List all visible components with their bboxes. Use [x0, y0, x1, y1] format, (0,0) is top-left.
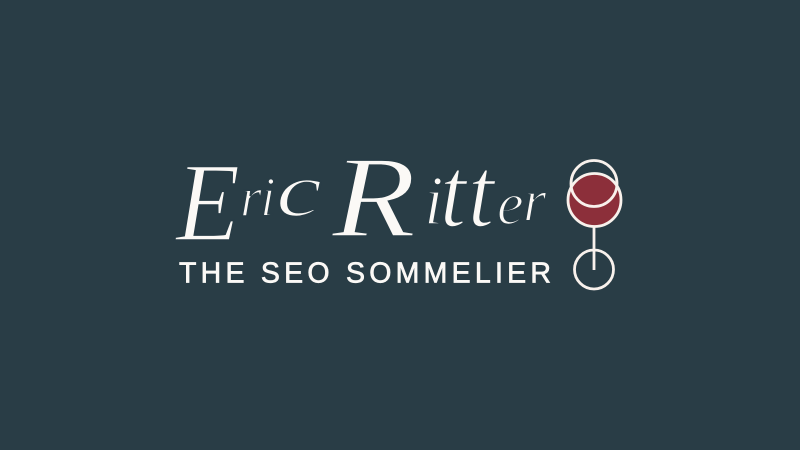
icon: wine glass: [568, 160, 621, 289]
signature name: e: [497, 171, 524, 237]
signature name: E: [174, 141, 240, 265]
wine bowl: [568, 174, 621, 226]
base circle: [574, 250, 614, 289]
stem: [593, 227, 595, 270]
signature name: i: [260, 167, 276, 229]
bowl rim circle: [571, 160, 617, 206]
signature name: [174, 134, 547, 265]
signature name: t: [440, 137, 468, 248]
signature name: R: [331, 134, 416, 262]
signature name: c: [276, 149, 322, 233]
signature name: i: [424, 163, 443, 240]
signature name: t: [468, 137, 496, 248]
signature name: r: [240, 167, 262, 229]
signature name: r: [523, 168, 547, 234]
tagline: THE SEO SOMMELIER: [179, 258, 551, 290]
